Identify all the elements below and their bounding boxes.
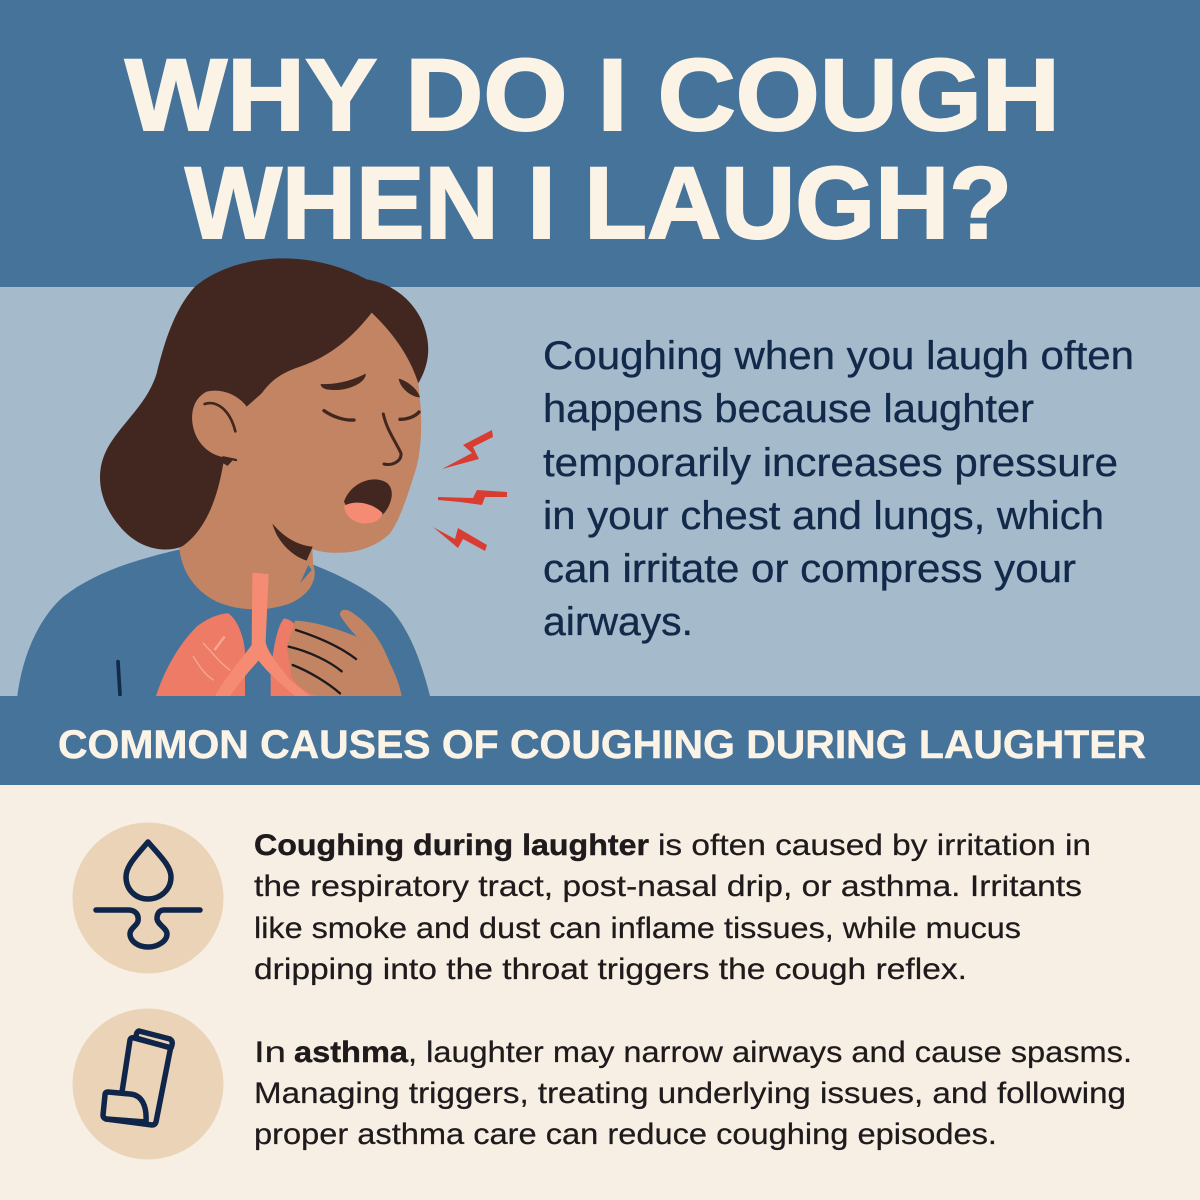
intro text: happens because laughter [543,387,1034,431]
section heading band [0,696,1200,785]
intro text: can irritate or compress your [543,547,1076,591]
mouth [344,479,392,517]
intro text: in your chest and lungs, which [543,494,1104,538]
intro text: airways. [543,600,693,644]
finger lines [289,630,356,693]
section heading: COMMON CAUSES OF COUGHING DURING LAUGHTER [58,723,1146,767]
title [125,38,1060,260]
left eyebrow [321,374,366,390]
intro text: temporarily increases pressure [543,441,1118,485]
collar shadow [300,565,312,583]
text: asthma paragraph [254,1036,1132,1151]
title: WHY DO I COUGH [125,38,1060,152]
chin shadow [272,523,313,561]
text: causes paragraph: the respiratory tract, post-nasal drip, or asthma. Irritants [254,870,1082,903]
title banner [0,0,1200,287]
hair [100,258,428,549]
trachea and bronchi [215,573,310,696]
text: asthma paragraph: asthma [294,1036,408,1069]
neck [179,463,315,609]
icon: inhaler [72,1008,224,1160]
text: asthma paragraph: , laughter may narrow airways and cause spasms. [408,1036,1132,1069]
text: asthma paragraph: In [254,1036,286,1069]
text: causes paragraph: is often caused by irritation in [658,829,1091,862]
lung veins [193,637,230,680]
right eyebrow [399,379,420,397]
intro text: Coughing when you laugh often [543,334,1134,378]
icon: cough sparks [433,430,507,551]
panel: introduction background [0,287,1200,696]
illustration: coughing woman [17,258,430,696]
ear [192,391,253,458]
title: WHEN I LAUGH? [185,146,1012,260]
text: asthma paragraph: proper asthma care can reduce coughing episodes. [254,1118,997,1151]
icon: mucus drip [72,822,224,974]
text: causes paragraph: Coughing during laughter [254,829,649,862]
closed eyes [324,411,419,420]
intro text [543,334,1134,644]
hand [287,610,402,696]
text: asthma paragraph: Managing triggers, treating underlying issues, and following [254,1077,1126,1110]
text: causes paragraph: dripping into the throat triggers the cough reflex. [254,953,967,986]
sleeve seam [118,662,120,695]
face [223,313,421,553]
ear detail [205,403,235,431]
shirt [17,549,430,696]
lungs [156,613,245,696]
nose [383,414,401,464]
text: causes paragraph: like smoke and dust can inflame tissues, while mucus [254,912,1021,945]
tongue [344,503,383,523]
text: causes paragraph [254,829,1091,986]
